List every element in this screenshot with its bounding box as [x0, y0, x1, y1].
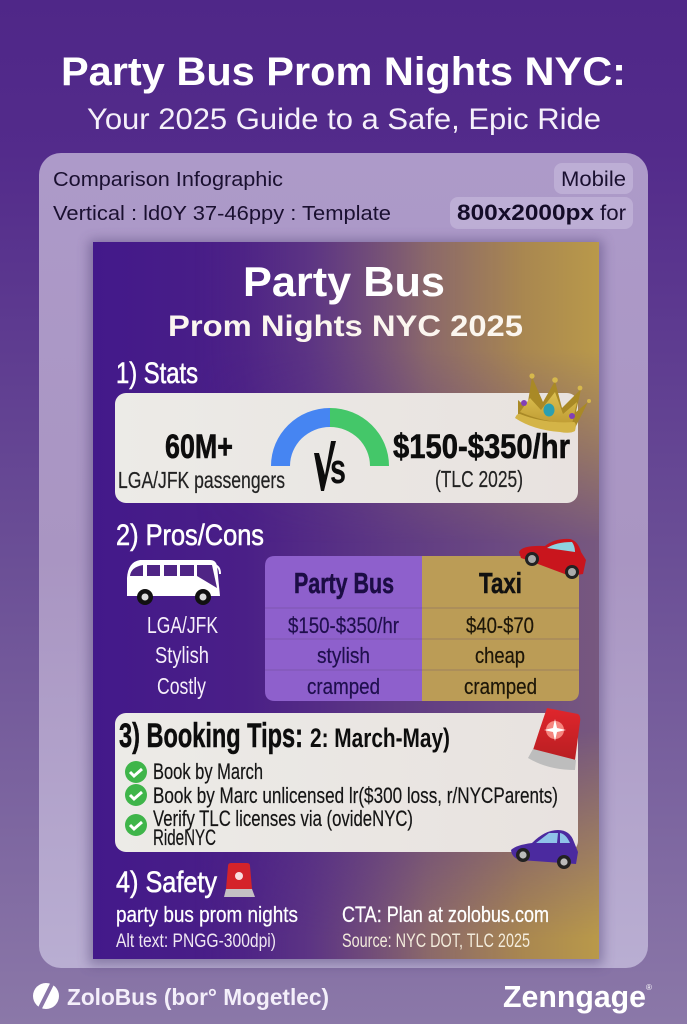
main title: Party Bus Prom Nights NYC: — [61, 50, 626, 94]
heading: date range: 2: March-May) — [310, 723, 450, 753]
comparison table — [265, 556, 579, 701]
logo: zenngage: ® — [646, 983, 652, 992]
tip three: Verify TLC licenses via (ovideNYC) — [153, 806, 413, 831]
table header: taxi: Taxi — [479, 568, 522, 600]
icon: bus — [127, 560, 220, 605]
versus label — [314, 441, 346, 492]
pill: dimensions: for — [600, 202, 626, 225]
logo: zolobus: ZoloBus (bor° Mogetleс) — [67, 984, 329, 1010]
subtitle: Your 2025 Guide to a Safe, Epic Ride — [87, 103, 601, 136]
label: vertical template: Vertical : ld0Y 37-46ppy : Template — [53, 203, 391, 225]
pill: dimensions — [450, 197, 633, 229]
tip three: RideNYC — [153, 825, 216, 850]
icon: siren small — [224, 863, 255, 897]
footer: alt text: Alt text: PNGG-300dpi) — [116, 931, 276, 952]
pill: mobile: Mobile — [561, 168, 626, 191]
list: bus attributes: Stylish — [155, 642, 209, 668]
table cells: taxi: $40-$70 — [466, 613, 534, 638]
table cells: taxi: cheap — [475, 643, 525, 668]
pill: dimensions: 800x2000px — [457, 200, 595, 225]
icon: purple car — [511, 830, 578, 869]
icon: siren large — [528, 708, 580, 770]
tip two: Book by Marc unlicensed lr($300 loss, r/NYCParents) — [153, 783, 558, 808]
footer: source: Source: NYC DOT, TLC 2025 — [342, 931, 530, 952]
table cells: party bus: $150-$350/hr — [288, 613, 399, 638]
table cells: party bus: stylish — [317, 643, 370, 668]
table header: party bus: Party Bus — [294, 568, 394, 600]
logo: zenngage: Zenngage — [503, 979, 646, 1014]
list: bus attributes: LGA/JFK — [147, 612, 218, 638]
check icon three — [125, 814, 147, 836]
list: bus attributes — [147, 612, 218, 699]
panel: poster — [93, 242, 599, 959]
poster title: Party Bus — [243, 258, 445, 305]
panel: booking tips — [115, 713, 578, 852]
list: bus attributes: Costly — [157, 673, 206, 699]
check icon two — [125, 784, 147, 806]
heading: pros and cons: 2) Pros/Cons — [116, 519, 264, 552]
gauge chart — [271, 408, 389, 466]
icon: crown — [515, 373, 591, 433]
pill: mobile — [554, 163, 633, 194]
tip one: Book by March — [153, 759, 263, 784]
table cells: party bus — [288, 613, 399, 699]
versus label: s — [330, 445, 346, 492]
table cells: taxi: cramped — [464, 674, 537, 699]
footer: call to action: CTA: Plan at zolobus.com — [342, 902, 549, 927]
check icon one — [125, 761, 147, 783]
panel: template card — [39, 153, 648, 968]
tip three — [153, 806, 413, 850]
heading: stats: 1) Stats — [116, 357, 198, 390]
table cells: taxi — [464, 613, 537, 699]
stat: passengers value: 60M+ — [165, 428, 233, 466]
icon: red car — [519, 539, 586, 579]
panel: stats card — [115, 393, 578, 503]
footer: keyword: party bus prom nights — [116, 902, 298, 927]
stat: price source: (TLC 2025) — [435, 466, 523, 492]
heading: safety: 4) Safety — [116, 866, 217, 899]
label: comparison infographic: Comparison Infographic — [53, 169, 283, 191]
poster subtitle: Prom Nights NYC 2025 — [168, 310, 523, 343]
table cells: party bus: cramped — [307, 674, 380, 699]
heading: booking tips: 3) Booking Tips: — [119, 717, 303, 755]
stat: price value: $150-$350/hr — [393, 428, 570, 466]
poster shadow — [89, 240, 603, 965]
stat: passengers label: LGA/JFK passengers — [118, 467, 285, 493]
